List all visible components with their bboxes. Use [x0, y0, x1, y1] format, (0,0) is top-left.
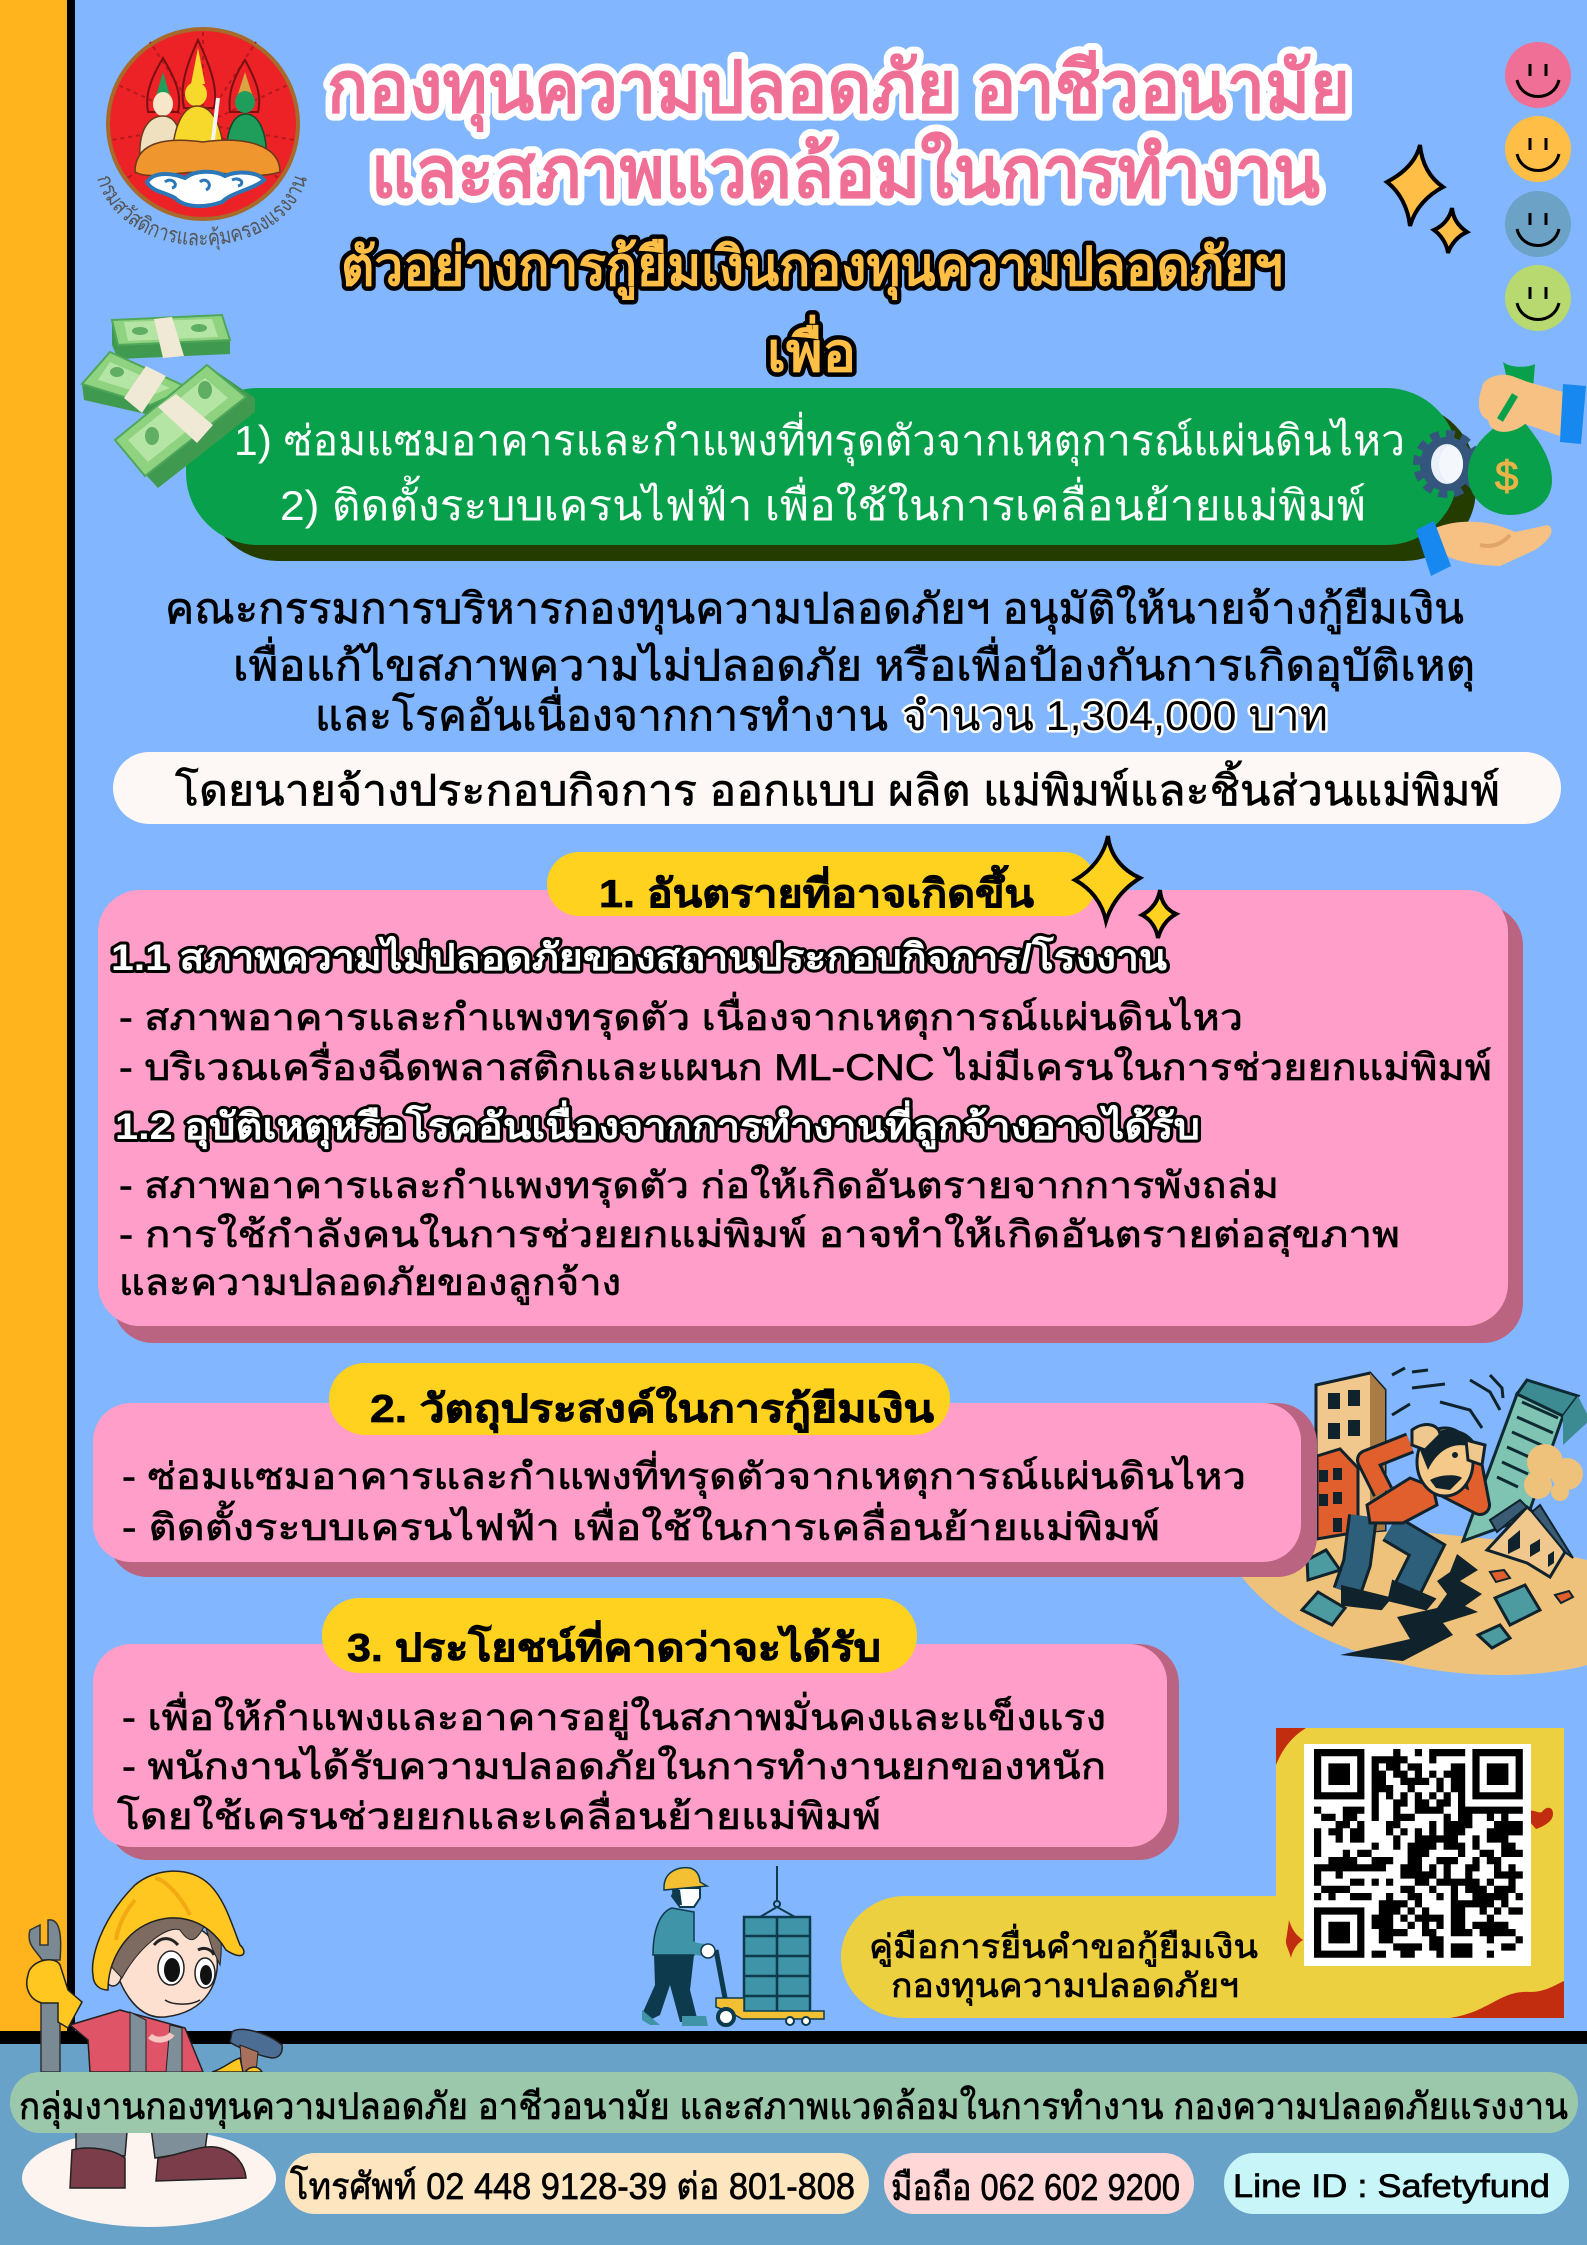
- left yellow band: [0, 0, 75, 2031]
- sub heading 1.2: 1.2 อุบัติเหตุหรือโรคอันเนื่องจากการทำงานที่ลูกจ้างอาจได้รับ: [115, 1100, 1200, 1150]
- footer band: [0, 2031, 1587, 2245]
- sub heading 1.1: 1.1 สภาพความไม่ปลอดภัยของสถานประกอบกิจการ/โรงงาน: [111, 935, 1167, 978]
- smiley faces column: [1505, 42, 1571, 331]
- phone pill: โทรศัพท์ 02 448 9128-39 ต่อ 801-808: [290, 2165, 855, 2207]
- white business pill: [113, 752, 1561, 824]
- line id pill: Line ID : Safetyfund: [1233, 2168, 1550, 2204]
- hazard line: - สภาพอาคารและกำแพงทรุดตัว ก่อให้เกิดอันตรายจากการพังถล่ม: [119, 1164, 1279, 1208]
- footer department pill: [10, 2072, 1578, 2133]
- benefit line 1: - เพื่อให้กำแพงและอาคารอยู่ในสภาพมั่นคงและแข็งแรง: [122, 1691, 1106, 1740]
- subtitle: for: เพื่อ: [767, 314, 856, 383]
- illustration: white ellipse under boy: [22, 2129, 276, 2227]
- heading pill 3: [322, 1598, 917, 1673]
- logo caption arc: กรมสวัสดิการและคุ้มครองแรงงาน: [98, 176, 307, 250]
- handbook text line 2: กองทุนความปลอดภัยฯ: [891, 1967, 1239, 2006]
- icon: hands with money bag and gear: $: [1495, 452, 1518, 499]
- objective line 1: - ซ่อมแซมอาคารและกำแพงที่ทรุดตัวจากเหตุการณ์แผ่นดินไหว: [122, 1450, 1246, 1499]
- sparkles beside heading 1: [1075, 836, 1176, 938]
- title line 1: กองทุนความปลอดภัย อาชีวอนามัย: [327, 48, 1350, 133]
- banner line 1: 1) ซ่อมแซมอาคารและกำแพงที่ทรุดตัวจากเหตุการณ์แผ่นดินไหว: [234, 412, 1405, 467]
- mobile pill: มือถือ 062 602 9200: [891, 2167, 1180, 2208]
- line id pill: [1224, 2153, 1569, 2214]
- heading pill 2: [329, 1363, 950, 1435]
- handbook text line 1: คู่มือการยื่นคำขอกู้ยืมเงิน: [869, 1924, 1258, 1967]
- panel: green purpose banner: [186, 388, 1476, 561]
- heading pill 1: [547, 852, 1096, 916]
- hazard line: - บริเวณเครื่องฉีดพลาสติกและแผนก ML-CNC ไม่มีเครนในการช่วยยกแม่พิมพ์: [119, 1041, 1492, 1088]
- paragraph line 1: คณะกรรมการบริหารกองทุนความปลอดภัยฯ อนุมัติให้นายจ้างกู้ยืมเงิน: [165, 585, 1464, 635]
- white business pill: โดยนายจ้างประกอบกิจการ ออกแบบ ผลิต แม่พิมพ์และชิ้นส่วนแม่พิมพ์: [175, 760, 1500, 814]
- heading pill 3: 3. ประโยชน์ที่คาดว่าจะได้รับ: [347, 1620, 881, 1670]
- illustration: warehouse worker with pallet truck: [642, 1866, 824, 2026]
- illustration: man in earthquake: [1242, 1368, 1587, 1675]
- logo: department seal: [108, 29, 298, 219]
- mobile pill: [884, 2153, 1194, 2214]
- subtitle: ตัวอย่างการกู้ยืมเงินกองทุนความปลอดภัยฯ: [341, 237, 1283, 301]
- phone pill: [285, 2153, 869, 2214]
- heading pill 2: 2. วัตถุประสงค์ในการกู้ยืมเงิน: [370, 1386, 934, 1433]
- panel 1: hazards: [98, 852, 1523, 1343]
- icon: hands with money bag and gear: [1416, 362, 1586, 576]
- sparkles near title: [1387, 145, 1467, 253]
- icon: stacks of money: [82, 315, 255, 488]
- loan amount: จำนวน 1,304,000 บาท: [902, 692, 1328, 739]
- panel 2: objectives: [93, 1363, 1317, 1577]
- title line 2: และสภาพแวดล้อมในการทำงาน: [371, 130, 1320, 213]
- QR code: [1304, 1744, 1531, 1966]
- panel: QR and handbook callout: [841, 1728, 1564, 2018]
- hazard line: - สภาพอาคารและกำแพงทรุดตัว เนื่องจากเหตุการณ์แผ่นดินไหว: [119, 991, 1243, 1040]
- heading pill 1: 1. อันตรายที่อาจเกิดขึ้น: [599, 865, 1034, 916]
- paragraph line 2: เพื่อแก้ไขสภาพความไม่ปลอดภัย หรือเพื่อป้องกันการเกิดอุบัติเหตุ: [233, 637, 1475, 692]
- illustration: boy in hard hat: [27, 1871, 282, 2188]
- paragraph line 3: และโรคอันเนื่องจากการทำงาน: [315, 687, 888, 739]
- benefit line 2: - พนักงานได้รับความปลอดภัยในการทำงานยกของหนัก: [122, 1745, 1106, 1787]
- hazard line: และความปลอดภัยของลูกจ้าง: [119, 1262, 621, 1305]
- panel 3: benefits: [93, 1598, 1179, 1860]
- hazard line: - การใช้กำลังคนในการช่วยยกแม่พิมพ์ อาจทำให้เกิดอันตรายต่อสุขภาพ: [119, 1213, 1400, 1257]
- benefit line 3: โดยใช้เครนช่วยยกและเคลื่อนย้ายแม่พิมพ์: [117, 1790, 881, 1837]
- objective line 2: - ติดตั้งระบบเครนไฟฟ้า เพื่อใช้ในการเคลื่อนย้ายแม่พิมพ์: [122, 1500, 1160, 1548]
- banner line 2: 2) ติดตั้งระบบเครนไฟฟ้า เพื่อใช้ในการเคลื่อนย้ายแม่พิมพ์: [280, 475, 1366, 529]
